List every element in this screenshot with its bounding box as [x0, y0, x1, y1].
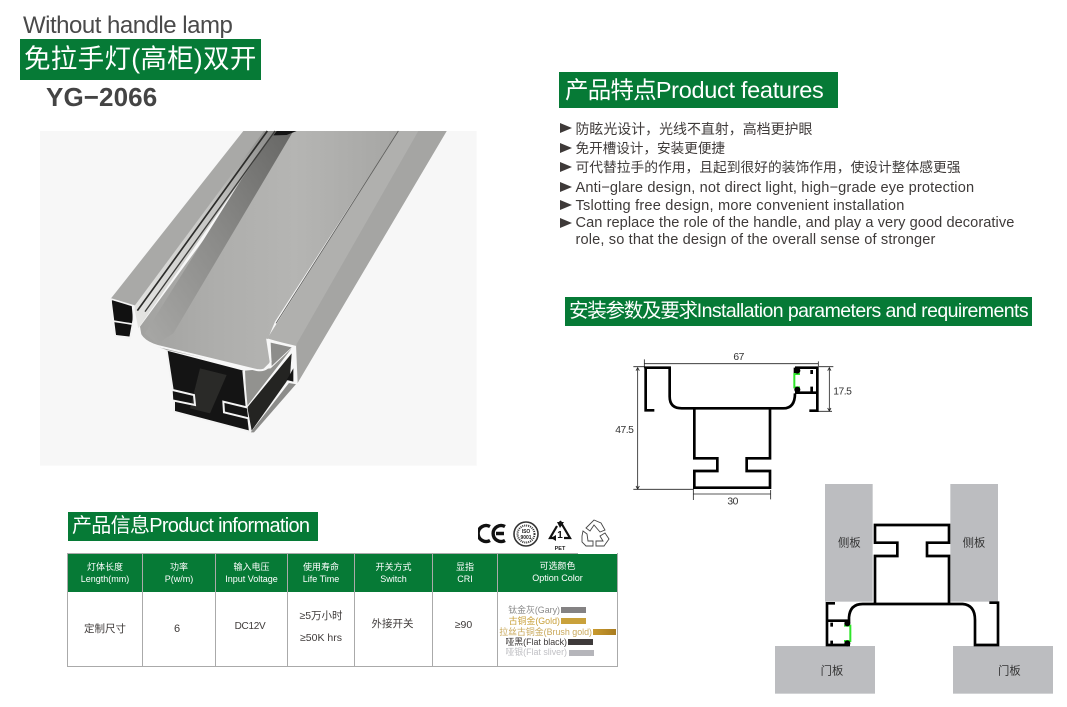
LED strip [794, 374, 800, 387]
column: CRI: CRI [457, 574, 473, 584]
column: switch [355, 554, 432, 630]
heading: installation parameters: 安装参数及要求Installation parameters and requirements [569, 300, 1028, 322]
product info table [67, 553, 618, 667]
column: power: 6 [174, 623, 180, 635]
LED strip [844, 626, 850, 641]
feature line 1: 防眩光设计，光线不直射，高档更护眼 [576, 121, 812, 137]
profile section [646, 368, 817, 488]
column: CRI: 显指 [456, 562, 474, 572]
column: voltage: 输入电压 [233, 562, 270, 572]
icon: ISO seal: 9001 [520, 535, 532, 541]
title: english product name: Without handle lamp [23, 12, 232, 39]
column: option colour: 拉丝古铜金(Brush gold) [499, 627, 592, 637]
right wall [267, 131, 447, 383]
panel labels: 侧板 [963, 535, 985, 549]
column: option colour: 古铜金(Gold) [509, 616, 560, 626]
panel labels: 门板 [998, 664, 1021, 678]
model number: YG−2066 [46, 82, 157, 112]
feature line 6 [560, 215, 1014, 248]
table grid [67, 553, 618, 667]
side and door panels [775, 484, 1053, 694]
icon: recycle symbol [582, 520, 609, 546]
column: voltage: DC12V [235, 621, 265, 632]
feature line 2: 免开槽设计，安装更便捷 [576, 141, 725, 156]
groove bands [145, 131, 293, 344]
title: chinese name banner: 免拉手灯(高柜)双开 [24, 44, 257, 74]
panel labels: 侧板 [838, 535, 861, 549]
feature line 5: Tslotting free design, more convenient installation [576, 198, 905, 214]
left end face [112, 300, 133, 337]
panel labels: 门板 [821, 664, 843, 678]
dimension drawing [615, 352, 852, 507]
feature line 4: Anti−glare design, not direct light, high−grade eye protection [576, 180, 974, 196]
column: option colour: 可选颜色 [539, 561, 576, 571]
column: power: 功率 [170, 562, 188, 572]
column: switch: 外接开关 [372, 618, 414, 630]
dimension values: 17.5 [833, 386, 852, 397]
column: power: P(w/m) [165, 574, 193, 584]
icon: CE mark [478, 526, 505, 542]
column: option colour: Option Color [532, 573, 583, 583]
column: voltage [216, 554, 287, 632]
installation diagram [775, 484, 1053, 694]
column: voltage: Input Voltage [225, 574, 278, 584]
heading: product features [559, 72, 838, 108]
column: length [68, 554, 142, 635]
column: CRI [433, 554, 497, 631]
column: length: 定制尺寸 [84, 623, 126, 635]
channel floor [140, 131, 398, 371]
certification icons [478, 520, 610, 552]
dimension values: 67 [733, 352, 745, 363]
column: CRI: ≥90 [455, 619, 472, 631]
icon: PET recycling triangle: 1 [557, 530, 563, 541]
feature line 6: role, so that the design of the overall sense of stronger [576, 232, 936, 248]
icon: PET recycling triangle [550, 521, 570, 552]
feature line 6: Can replace the role of the handle, and play a very good decorative [576, 215, 1014, 231]
column: switch: 开关方式 [375, 562, 412, 572]
column: life time [288, 554, 354, 644]
dimension values [615, 352, 852, 507]
column: length: 灯体长度 [87, 562, 123, 572]
product photo: aluminium profile [110, 130, 447, 433]
heading: product features: 产品特点Product features [565, 77, 823, 103]
lower body interior [167, 351, 250, 432]
column: life time: ≥5万小时 [299, 610, 343, 622]
icon: PET recycling triangle: PET [555, 546, 566, 552]
column: life time: 使用寿命 [303, 562, 339, 572]
icon: ISO seal: ISO [522, 529, 530, 535]
column: option colour: 钛金灰(Gary) [508, 605, 560, 615]
column: life time: ≥50K hrs [300, 632, 342, 644]
column: life time: Life Time [303, 574, 339, 584]
column: power [143, 554, 215, 635]
icon: ISO seal [514, 522, 538, 546]
dimension values: 47.5 [615, 425, 634, 436]
column: option colour: 哑黑(Flat black) [505, 637, 567, 647]
feature list [560, 121, 1014, 248]
panel labels [821, 535, 1021, 678]
left lip [111, 131, 264, 307]
dimension values: 30 [727, 496, 739, 507]
feature line 3: 可代替拉手的作用，且起到很好的装饰作用，使设计整体感更强 [576, 160, 961, 175]
lower right side [245, 348, 292, 407]
column: option colour [498, 554, 617, 657]
column: switch: Switch [380, 574, 407, 584]
profile fitted [827, 525, 998, 645]
heading: product information: 产品信息Product information [72, 515, 309, 537]
white cut edges [138, 328, 297, 383]
column: option colour: 哑银(Flat sliver) [505, 647, 567, 657]
column: length: Length(mm) [81, 574, 129, 584]
dimension lines [633, 359, 833, 500]
